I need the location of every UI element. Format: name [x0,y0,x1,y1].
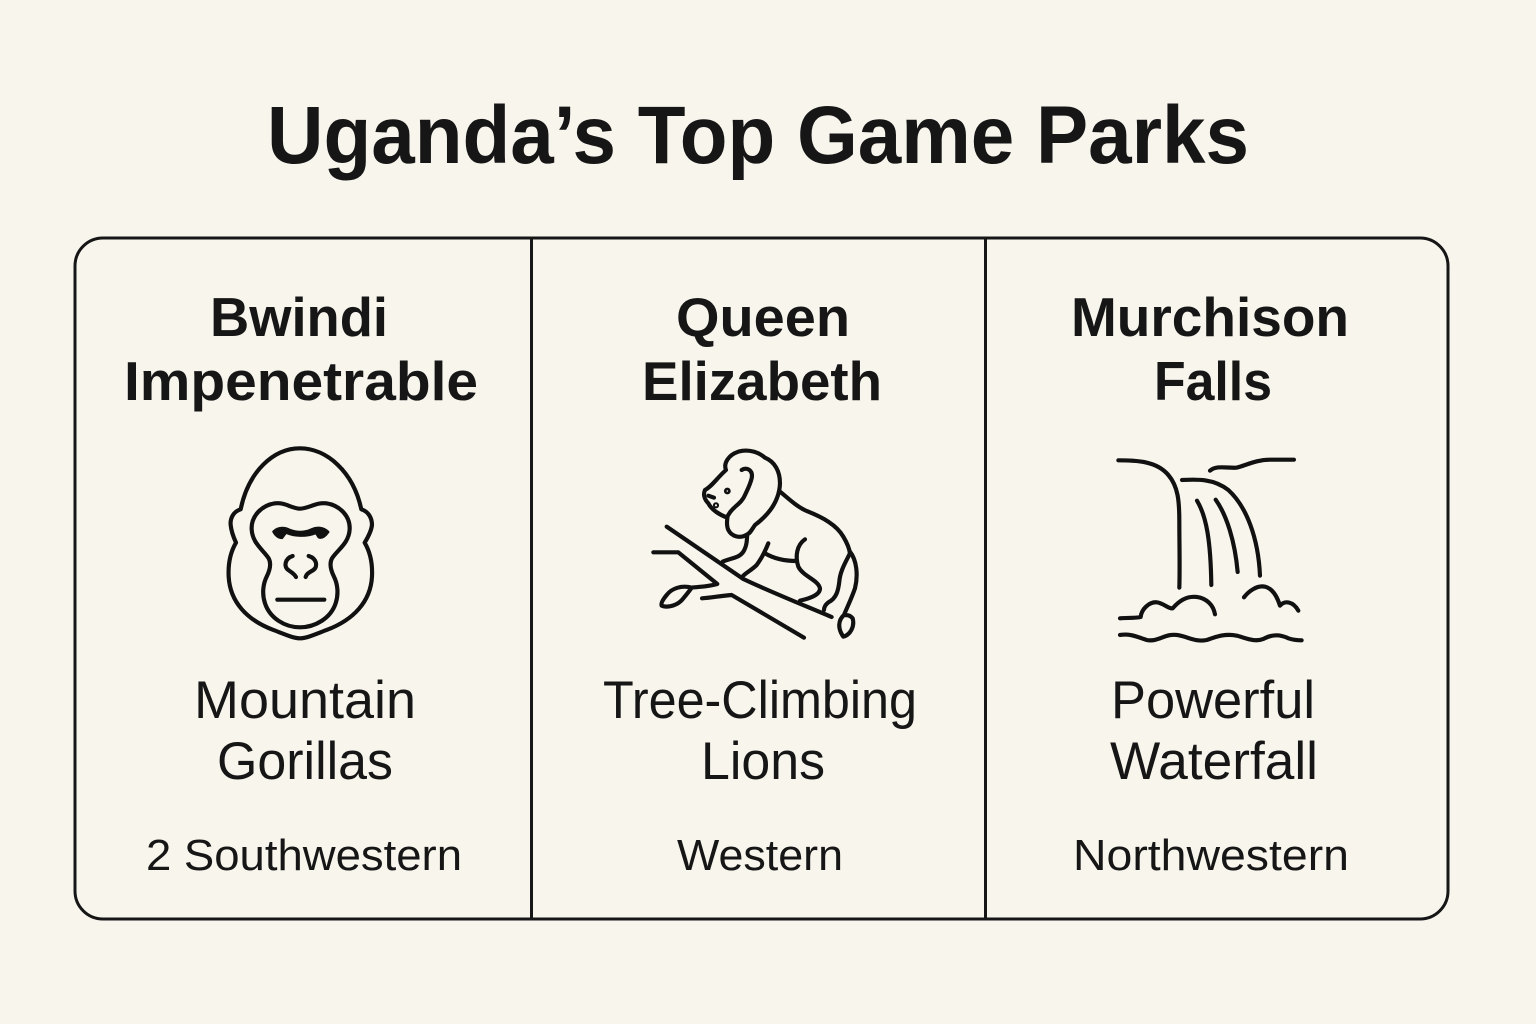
region: 2 Southwestern: 2 Southwestern [146,831,462,880]
icon: waterfall [1118,460,1302,641]
heading: Murchison Falls [1071,286,1349,412]
label: Mountain Gorillas: Gorillas [217,732,393,791]
icon: lion on a tree branch [653,451,857,638]
heading: Bwindi Impenetrable [124,286,478,412]
panel: Murchison Falls [1071,286,1349,880]
label: Tree-Climbing Lions [603,671,917,791]
label: Mountain Gorillas: Mountain [194,671,416,730]
label: Tree-Climbing Lions: Tree-Climbing [603,671,917,730]
icon: gorilla face [229,448,372,638]
panel: Queen Elizabeth [603,286,917,880]
label: Powerful Waterfall: Waterfall [1110,732,1318,791]
heading: Bwindi Impenetrable: Impenetrable [124,350,478,412]
title: Uganda’s Top Game Parks [267,90,1249,181]
heading: Murchison Falls: Murchison [1071,286,1349,348]
region: Northwestern: Northwestern [1073,831,1349,880]
heading: Murchison Falls: Falls [1154,350,1272,412]
region: Western: Western [677,831,843,880]
label: Tree-Climbing Lions: Lions [701,732,825,791]
label: Powerful Waterfall [1110,671,1318,791]
label: Mountain Gorillas [194,671,416,791]
label: Powerful Waterfall: Powerful [1111,671,1315,730]
panel: Bwindi Impenetrable [124,286,478,880]
heading: Queen Elizabeth [642,286,882,412]
panel: table of parks [75,238,1448,919]
heading: Bwindi Impenetrable: Bwindi [210,286,388,348]
heading: Queen Elizabeth: Elizabeth [642,350,882,412]
heading: Queen Elizabeth: Queen [676,286,850,348]
